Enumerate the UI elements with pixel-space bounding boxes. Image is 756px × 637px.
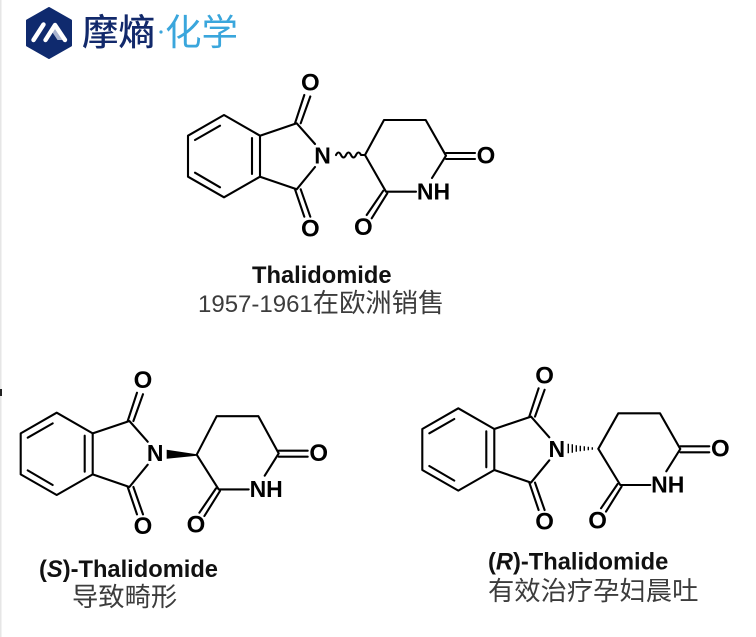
molecule: racemic thalidomide: O [477, 142, 495, 170]
molecule: (S)-thalidomide: O [134, 513, 152, 540]
logo text: 化学: 化学 [165, 3, 238, 56]
molecule: racemic thalidomide: NH [417, 178, 450, 204]
molecule: (S)-thalidomide: O [134, 367, 152, 394]
logo text: 摩熵: 摩熵 [82, 3, 155, 56]
molecule: (S)-thalidomide: O [309, 440, 328, 467]
molecule: racemic thalidomide: N [314, 142, 331, 168]
molecule: racemic thalidomide: O [354, 214, 373, 241]
molecule: (R)-thalidomide: NH [651, 471, 684, 497]
molecule: (S)-thalidomide [21, 367, 328, 540]
molecule: racemic thalidomide: O [301, 216, 320, 242]
molecule: racemic thalidomide: O [301, 70, 320, 96]
label: Thalidomide: Thalidomide [252, 263, 392, 289]
molecule: (S)-thalidomide: O [187, 512, 205, 539]
label: 1957-1961在欧洲销售: 1957-1961在欧洲销售 [198, 288, 444, 318]
molecule: (R)-thalidomide: N [548, 436, 565, 462]
molecule: (R)-thalidomide: O [588, 507, 607, 534]
logo dot [159, 30, 163, 34]
logo: 摩熵化学 [27, 3, 238, 58]
molecule: (R)-thalidomide: O [535, 508, 554, 535]
label: (R)-Thalidomide: (R)-Thalidomide [488, 550, 668, 576]
label: (S)-Thalidomide: (S)-Thalidomide [39, 557, 218, 583]
label: 有效治疗孕妇晨吐: 有效治疗孕妇晨吐 [488, 576, 698, 606]
label: 导致畸形: 导致畸形 [72, 582, 177, 612]
molecule: (R)-thalidomide: O [535, 362, 554, 389]
molecule: racemic thalidomide [188, 70, 495, 242]
molecule: (R)-thalidomide: O [711, 435, 730, 462]
molecule: (S)-thalidomide: NH [250, 476, 283, 502]
icon: hexagon logo mark [27, 8, 71, 58]
molecule: (S)-thalidomide: N [147, 440, 164, 466]
molecule: (R)-thalidomide [422, 362, 730, 535]
